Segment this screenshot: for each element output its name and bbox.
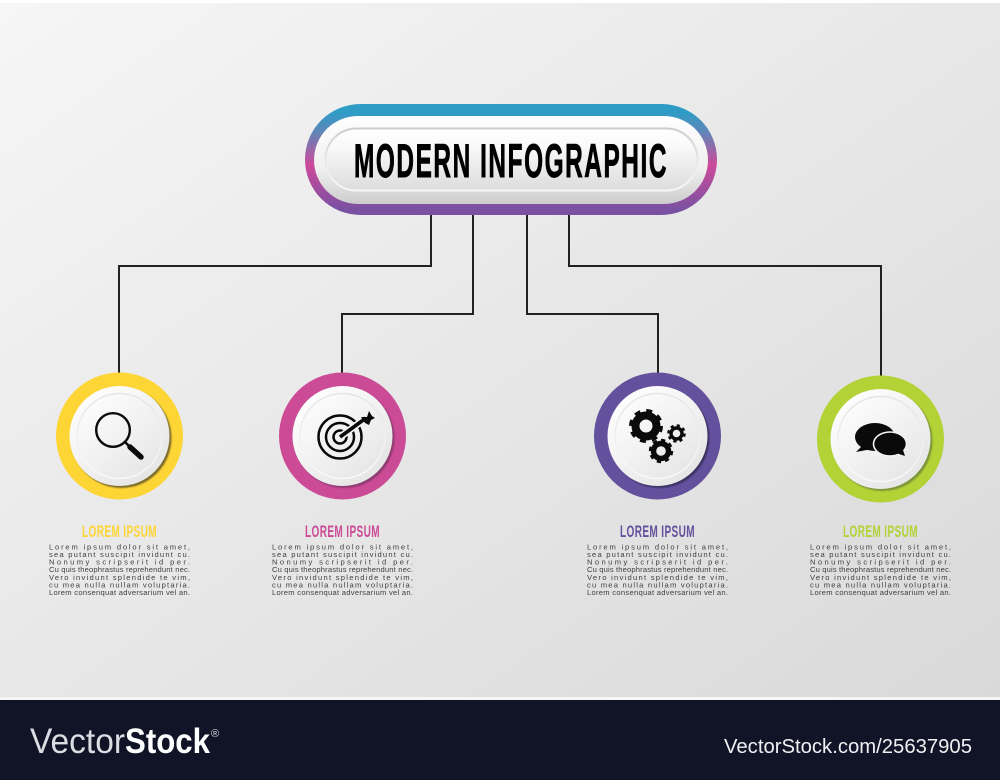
body 3: Lorem ipsum dolor sit amet, bbox=[587, 542, 728, 552]
body 4 bbox=[810, 542, 951, 597]
icon: gears bbox=[631, 411, 684, 462]
heading 3: LOREM IPSUM bbox=[620, 523, 695, 541]
body 4: Vero invidunt splendide te vim, bbox=[810, 573, 951, 582]
node 1: search bbox=[56, 372, 183, 500]
body 4: Lorem ipsum dolor sit amet, bbox=[810, 542, 951, 552]
heading 2: LOREM IPSUM bbox=[305, 523, 380, 541]
icon: magnifying glass bbox=[96, 413, 141, 457]
body 2: Nonumy scripserit id per. bbox=[272, 558, 413, 567]
body 4: sea putant suscipit invidunt cu. bbox=[810, 550, 951, 559]
body 2: cu mea nulla nullam voluptaria. bbox=[272, 580, 413, 589]
body 4: Nonumy scripserit id per. bbox=[810, 558, 951, 567]
text block 3 bbox=[587, 523, 728, 597]
body 2 bbox=[272, 542, 413, 597]
body 3: cu mea nulla nullam voluptaria. bbox=[587, 580, 728, 589]
title: MODERN INFOGRAPHIC bbox=[354, 134, 668, 187]
heading 1: LOREM IPSUM bbox=[82, 523, 157, 541]
node 4: chat bbox=[817, 376, 944, 502]
body 1: Nonumy scripserit id per. bbox=[49, 558, 190, 567]
body 2: sea putant suscipit invidunt cu. bbox=[272, 550, 413, 559]
body 4: Cu quis theophrastus reprehendunt nec. bbox=[810, 565, 951, 574]
text block 4 bbox=[810, 523, 951, 597]
footer logo: Vector bbox=[30, 722, 125, 761]
footer logo bbox=[30, 722, 219, 761]
body 1: Lorem consenquat adversarium vel an. bbox=[49, 588, 190, 597]
body 3: Lorem consenquat adversarium vel an. bbox=[587, 588, 728, 597]
body 2: Cu quis theophrastus reprehendunt nec. bbox=[272, 565, 413, 574]
body 3: Cu quis theophrastus reprehendunt nec. bbox=[587, 565, 728, 574]
body 1: Vero invidunt splendide te vim, bbox=[49, 573, 190, 582]
connector lines bbox=[119, 214, 881, 378]
footer logo: Stock bbox=[125, 722, 210, 761]
body 3: sea putant suscipit invidunt cu. bbox=[587, 550, 728, 559]
node 2: target bbox=[279, 372, 406, 500]
body 3 bbox=[587, 542, 728, 597]
node 3: gears bbox=[594, 372, 721, 500]
body 4: cu mea nulla nullam voluptaria. bbox=[810, 580, 951, 589]
text block 1 bbox=[49, 523, 190, 597]
footer bar bbox=[0, 700, 1000, 780]
body 1: Cu quis theophrastus reprehendunt nec. bbox=[49, 565, 190, 574]
icon: target with arrow bbox=[318, 411, 375, 458]
heading 4: LOREM IPSUM bbox=[843, 523, 918, 541]
body 4: Lorem consenquat adversarium vel an. bbox=[810, 588, 951, 597]
body 1: cu mea nulla nullam voluptaria. bbox=[49, 580, 190, 589]
footer id: VectorStock.com/25637905 bbox=[724, 736, 972, 758]
body 1 bbox=[49, 542, 190, 597]
body 1: sea putant suscipit invidunt cu. bbox=[49, 550, 190, 559]
body 2: Vero invidunt splendide te vim, bbox=[272, 573, 413, 582]
icon: speech bubbles bbox=[855, 423, 906, 456]
body 3: Vero invidunt splendide te vim, bbox=[587, 573, 728, 582]
body 2: Lorem ipsum dolor sit amet, bbox=[272, 542, 413, 552]
body 1: Lorem ipsum dolor sit amet, bbox=[49, 542, 190, 552]
text block 2 bbox=[272, 523, 413, 597]
title pill bbox=[305, 104, 717, 215]
body 2: Lorem consenquat adversarium vel an. bbox=[272, 588, 413, 597]
body 3: Nonumy scripserit id per. bbox=[587, 558, 728, 567]
footer logo: ® bbox=[211, 728, 219, 740]
